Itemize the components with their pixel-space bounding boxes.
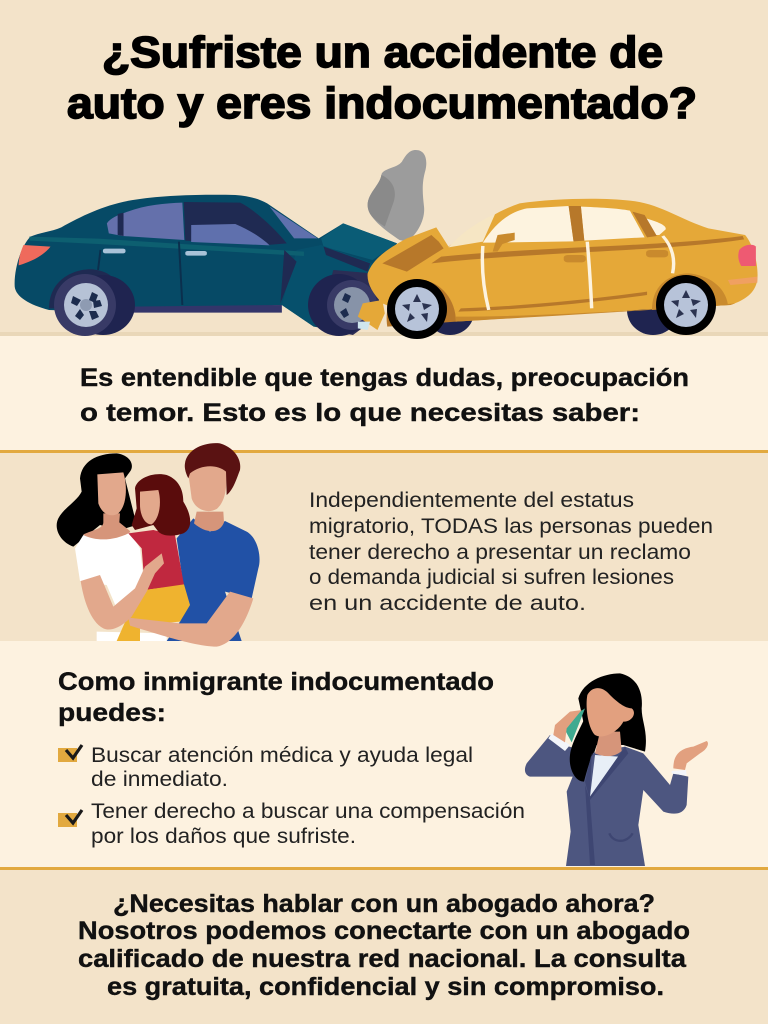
list item 1 [58,744,473,791]
paragraph: rights: Independientemente del estatus [309,489,634,512]
icon: check [58,745,82,762]
intro heading: o temor. Esto es lo que necesitas saber: [80,399,640,427]
wheel front [308,274,377,336]
man shirt [167,518,260,641]
rear tire behind body [627,285,679,335]
girl [128,530,184,590]
list item 1: de inmediato. [91,768,228,791]
intro heading: Es entendible que tengas dudas, preocupación [80,364,689,392]
paragraph: rights: en un accidente de auto. [309,592,586,615]
paragraph: rights: tener derecho a presentar un reclamo [309,541,691,564]
wheel rear [54,274,135,336]
title: ¿Sufriste un accidente de [102,28,663,77]
arms [81,553,164,630]
icon: smoke [368,150,426,242]
call to action: calificado de nuestra red nacional. La consulta [78,945,687,973]
call to action: es gratuita, confidencial y sin compromiso. [107,973,664,1001]
title [67,28,697,128]
subheading: Como inmigrante indocumentado [58,668,494,696]
yellow car [358,199,758,339]
intro heading [80,364,689,427]
paragraph: rights: o demanda judicial si sufren lesiones [309,566,674,589]
list item 1: Buscar atención médica y ayuda legal [91,744,473,767]
list item 2 [58,800,525,848]
illustration: family [57,443,260,647]
list item 2: por los daños que sufriste. [91,825,356,848]
paragraph: rights [309,489,713,615]
call to action [78,890,690,1001]
list item 2: Tener derecho a buscar una compensación [91,800,525,823]
wheel yellow rear [656,275,716,335]
blue car [15,195,397,336]
illustration: woman on phone [525,673,708,866]
subheading [58,668,494,727]
subheading: puedes: [58,699,166,727]
call to action: ¿Necesitas hablar con un abogado ahora? [113,890,655,918]
call to action: Nosotros podemos conectarte con un abogado [78,917,690,945]
paragraph: rights: migratorio, TODAS las personas pueden [309,515,713,538]
wheel yellow front [387,279,447,339]
illustration: car crash [15,150,758,339]
title: auto y eres indocumentado? [67,79,697,128]
woman [57,453,137,547]
icon: check [58,810,82,827]
